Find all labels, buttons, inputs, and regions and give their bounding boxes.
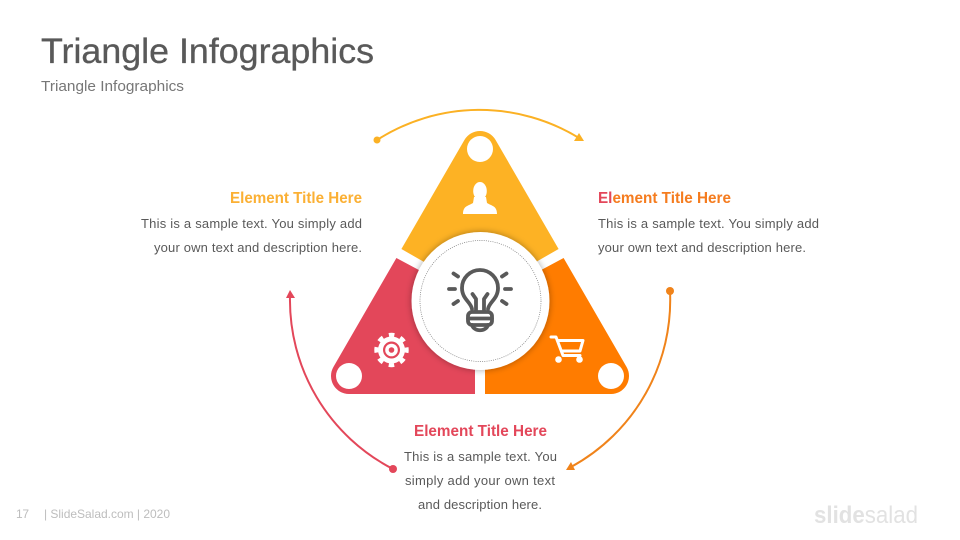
icon: cart — [551, 337, 583, 361]
center circle — [412, 232, 550, 370]
body: right: your own text and description here. — [598, 240, 806, 255]
body: bottom — [404, 449, 557, 512]
body: bottom: This is a sample text. You — [404, 449, 557, 464]
body: left: your own text and description here. — [154, 240, 362, 255]
body: left — [141, 216, 362, 255]
text block: bottom — [404, 423, 557, 512]
subtitle: Triangle Infographics — [41, 78, 184, 95]
footer: source: | SlideSalad.com | 2020 — [44, 507, 170, 521]
body: bottom: and description here. — [418, 497, 542, 512]
arc arrow: top — [374, 110, 584, 144]
triangle segment: left — [331, 258, 475, 394]
body: right — [598, 216, 819, 255]
heading: left: Element Title Here — [230, 190, 362, 207]
icon: person — [463, 182, 497, 214]
triangle segment: top — [401, 131, 559, 294]
body: bottom: simply add your own text — [405, 473, 555, 488]
icon: gear — [376, 335, 407, 365]
icon: light bulb — [449, 270, 511, 330]
body: right: This is a sample text. You simply add — [598, 216, 819, 231]
logo: slidesalad: slidesalad — [814, 502, 918, 529]
arc arrow: right — [566, 287, 674, 470]
title: Triangle Infographics — [41, 32, 374, 71]
text block: right — [598, 190, 819, 255]
footer: page number: 17 — [16, 507, 29, 521]
body: left: This is a sample text. You simply add — [141, 216, 362, 231]
arc arrow: left — [286, 290, 397, 473]
heading: bottom: Element Title Here — [414, 423, 547, 440]
heading: right: Element Title Here — [598, 190, 731, 207]
text block: left — [141, 190, 362, 255]
triangle segment: right — [485, 258, 629, 394]
